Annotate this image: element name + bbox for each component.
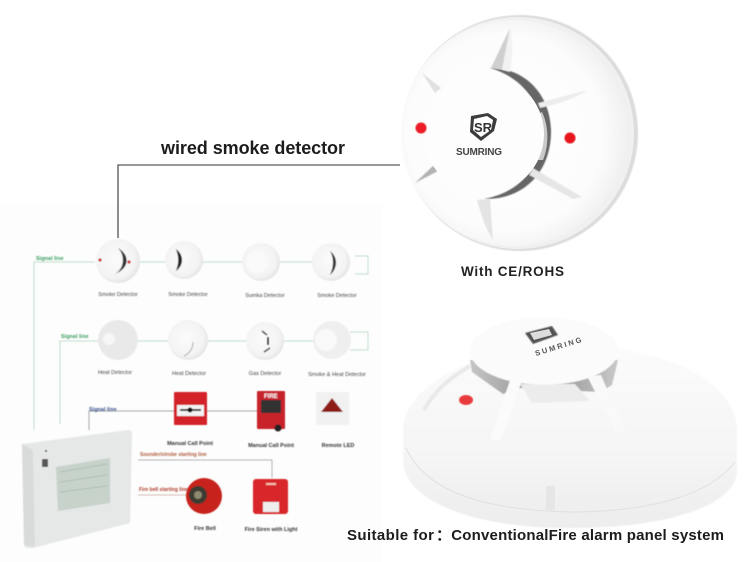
icon: smoke and heat detector bbox=[313, 321, 351, 359]
vents bbox=[490, 375, 626, 440]
text: suitable for: Suitable for bbox=[347, 527, 434, 544]
icon: smoke detector 1 bbox=[96, 239, 140, 283]
text: row 2 labels: Heat Detector bbox=[98, 370, 132, 376]
logo wordmark: SUMRING bbox=[456, 147, 502, 158]
text: bottom labels bbox=[194, 526, 298, 533]
text: row 1 labels bbox=[98, 292, 357, 299]
text: signal line labels: Signal line bbox=[89, 407, 117, 413]
icon: tilted logo bbox=[525, 326, 558, 344]
text: signal line labels bbox=[36, 256, 207, 493]
icon: fire alarm control panel bbox=[22, 430, 132, 548]
text: row 1 labels: Smoke Detector bbox=[98, 292, 138, 298]
text: row 1 labels: Smoke Detector bbox=[168, 292, 208, 298]
panel: system diagram background bbox=[0, 205, 381, 562]
text: row 3 labels: Manual Call Point bbox=[167, 441, 213, 447]
text: row 3 labels bbox=[167, 441, 354, 449]
icon: remote LED bbox=[316, 392, 349, 425]
text: row 2 labels bbox=[98, 370, 366, 378]
icon: heat detector 1 bbox=[98, 320, 138, 360]
text: signal line labels: Sounder/strobe starting line bbox=[140, 452, 207, 458]
text: row 2 labels: Heat Detector bbox=[172, 371, 206, 377]
icon: manual call point 2 bbox=[257, 391, 285, 432]
icon: SR shield logo bbox=[470, 113, 497, 141]
cap bbox=[470, 317, 618, 385]
icon: manual call point 2: FIRE bbox=[264, 394, 278, 400]
text: row 1 labels: Sumka Detector bbox=[245, 293, 285, 299]
text: signal line labels: Signal line bbox=[36, 256, 64, 262]
icon: smoke detector 3 bbox=[242, 243, 280, 281]
text: row 1 labels: Smoke Detector bbox=[317, 293, 357, 299]
icon: smoke detector 4 bbox=[312, 243, 350, 281]
text: panel system: ：ConventionalFire alarm panel system bbox=[436, 527, 724, 544]
icon: SR shield logo: SR bbox=[474, 120, 493, 135]
icon: fire bell bbox=[186, 478, 222, 514]
logo wordmark: SUMRING bbox=[534, 335, 583, 358]
row 2 detectors bbox=[98, 320, 351, 360]
title: wired smoke detector: wired smoke detector bbox=[160, 138, 345, 158]
dark ring around sensor cap bbox=[484, 68, 551, 199]
panel: bottom detector product photo bbox=[403, 317, 737, 528]
icon: fire siren with light bbox=[253, 479, 288, 514]
text: signal line labels: Signal line bbox=[61, 334, 89, 340]
text: certification: With CE/ROHS bbox=[461, 264, 564, 279]
text: row 2 labels: Gas Detector bbox=[249, 371, 281, 377]
leader line from title to detector bbox=[118, 165, 400, 238]
seam tab bbox=[546, 486, 555, 510]
signal wiring bbox=[34, 256, 368, 495]
icon: gas detector bbox=[246, 322, 284, 360]
sensor cap bbox=[424, 74, 544, 194]
text: row 2 labels: Smoke & Heat Detector bbox=[308, 372, 366, 378]
text: signal line labels: Fire bell starting line bbox=[139, 487, 188, 493]
text: row 3 labels: Remote LED bbox=[322, 443, 354, 449]
LEDs bbox=[416, 122, 426, 134]
text: bottom labels: Fire Siren with Light bbox=[245, 527, 298, 533]
icon: manual call point 1 bbox=[174, 392, 207, 425]
icon: smoke detector 2 bbox=[165, 241, 203, 279]
vents bbox=[415, 28, 588, 240]
text: row 3 labels: Manual Call Point bbox=[248, 443, 294, 449]
panel: top detector product photo bbox=[401, 15, 638, 251]
text: bottom labels: Fire Bell bbox=[194, 526, 216, 532]
LED bbox=[459, 395, 473, 405]
icon: heat detector 2 bbox=[168, 320, 208, 360]
inner sensor gap bbox=[470, 360, 618, 403]
row 1 smoke detectors bbox=[96, 239, 350, 283]
